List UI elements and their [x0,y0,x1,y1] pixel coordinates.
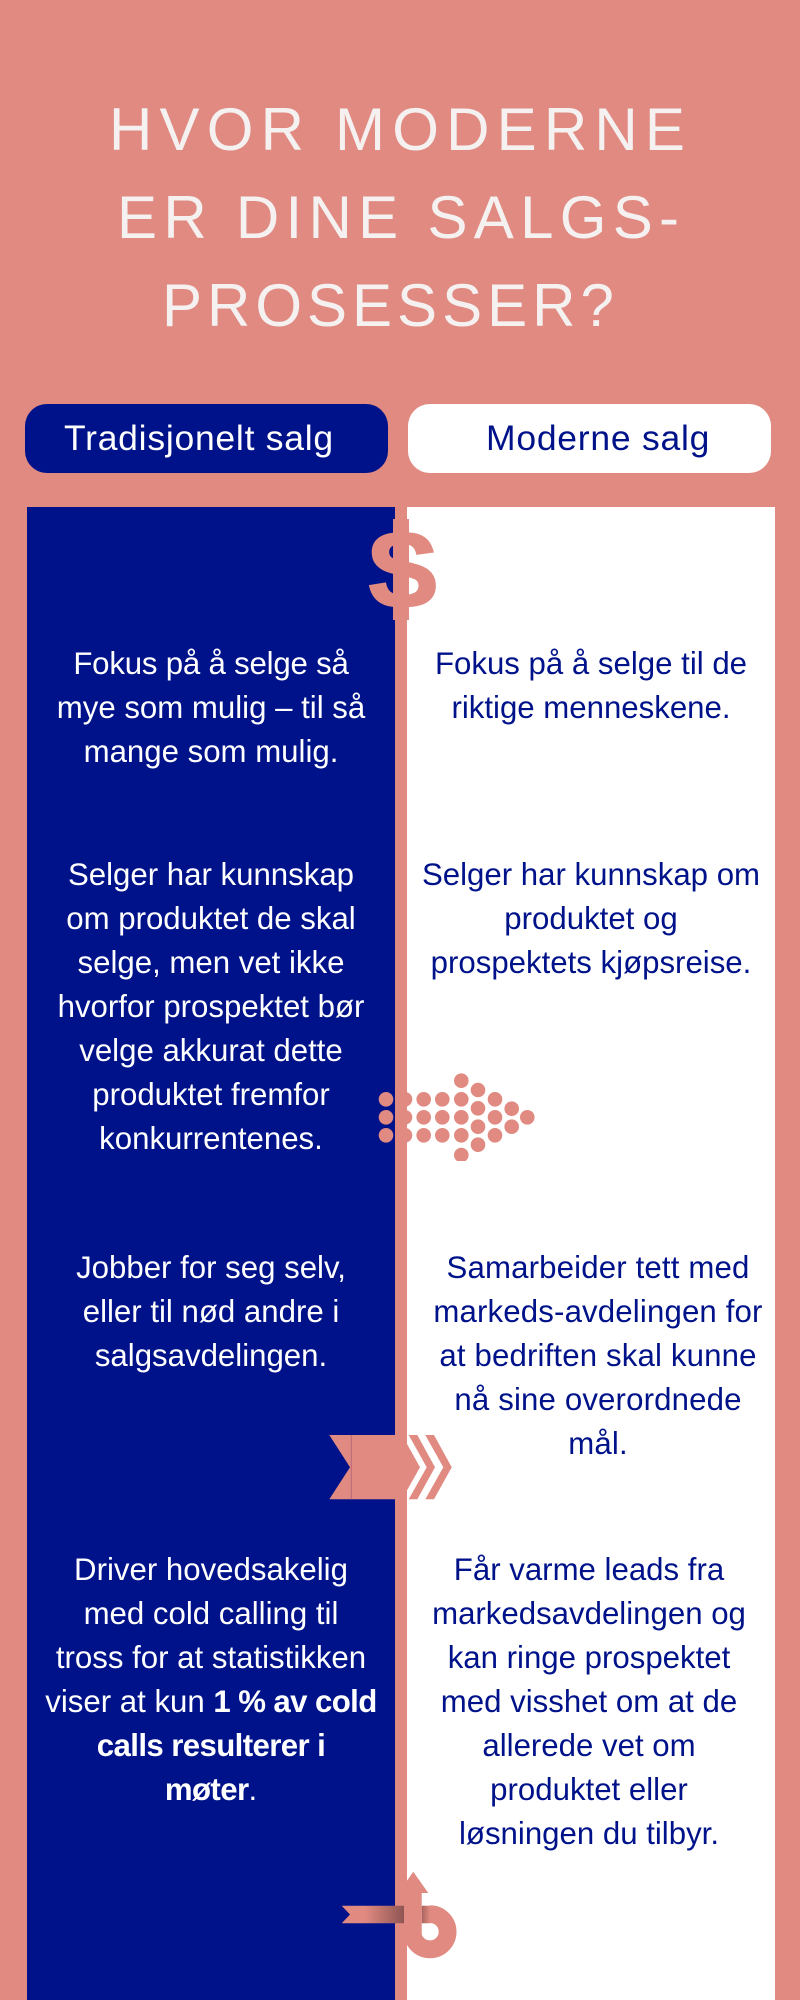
text: modern 2: Selger har kunnskap om [422,857,760,892]
text: modern 3: Samarbeider tett med [447,1250,749,1285]
button: Moderne salg [408,404,771,473]
text: modern 3 [433,1250,763,1461]
text: traditional 2: hvorfor prospektet bør [58,989,364,1024]
text: traditional 1 [57,646,366,769]
text: traditional 4: Driver hovedsakelig [74,1552,348,1587]
text: traditional 2: konkurrentenes. [99,1121,323,1156]
text: modern 4: produktet eller [490,1772,688,1807]
text: traditional 4: viser at kun 1 % av cold [45,1684,377,1719]
button: Tradisjonelt salg: Tradisjonelt salg [64,418,334,458]
text: traditional 3: salgsavdelingen. [95,1338,327,1373]
text: traditional 1: mange som mulig. [84,734,338,769]
text: modern 2: prospektets kjøpsreise. [431,945,751,980]
panel: modern column [407,507,775,2000]
text: modern 4: kan ringe prospektet [448,1640,730,1675]
text: modern 4: løsningen du tilbyr. [459,1816,719,1851]
title: ER DINE SALGS- [117,184,685,251]
text: modern 3: markeds-avdelingen for [433,1294,763,1329]
text: traditional 4 [45,1552,377,1807]
text: traditional 2: produktet fremfor [92,1077,330,1112]
text: modern 3: nå sine overordnede [454,1382,742,1417]
text: traditional 4: calls resulterer i [97,1728,325,1763]
text: traditional 3: eller til nød andre i [83,1294,339,1329]
text: traditional 1: Fokus på å selge så [73,646,349,681]
text: modern 4 [432,1552,746,1851]
icon: dollar sign: $ [368,508,437,630]
text: traditional 3 [76,1250,346,1373]
button: Tradisjonelt salg [25,404,388,473]
icon: looping ribbon arrow [342,1872,456,1958]
text: traditional 2: selge, men vet ikke [78,945,344,980]
text: traditional 4: med cold calling til [84,1596,338,1631]
text: modern 1: riktige menneskene. [451,690,731,725]
text: modern 3: at bedriften skal kunne [439,1338,757,1373]
text: traditional 2: velge akkurat dette [79,1033,343,1068]
text: modern 1: Fokus på å selge til de [435,646,747,681]
text: modern 2 [422,857,760,980]
text: modern 3: mål. [568,1426,628,1461]
title: HVOR MODERNE [109,96,692,163]
text: modern 1 [435,646,747,725]
text: modern 4: allerede vet om [482,1728,696,1763]
icon: ribbon arrow with chevrons [329,1435,452,1500]
text: traditional 3: Jobber for seg selv, [76,1250,346,1285]
text: modern 4: Får varme leads fra [454,1552,724,1587]
text: traditional 1: mye som mulig – til så [57,690,365,725]
text: modern 4: med visshet om at de [441,1684,737,1719]
panel: traditional column [27,507,395,2000]
button: Moderne salg: Moderne salg [486,418,710,458]
icon: dotted arrow [378,1073,535,1161]
text: traditional 2: om produktet de skal [66,901,356,936]
text: traditional 2 [58,857,364,1156]
text: modern 4: markedsavdelingen og [432,1596,746,1631]
text: traditional 4: møter. [165,1772,257,1807]
text: modern 2: produktet og [504,901,678,936]
title: PROSESSER? [162,272,619,339]
text: traditional 2: Selger har kunnskap [68,857,354,892]
text: traditional 4: tross for at statistikken [56,1640,366,1675]
title [109,96,692,339]
